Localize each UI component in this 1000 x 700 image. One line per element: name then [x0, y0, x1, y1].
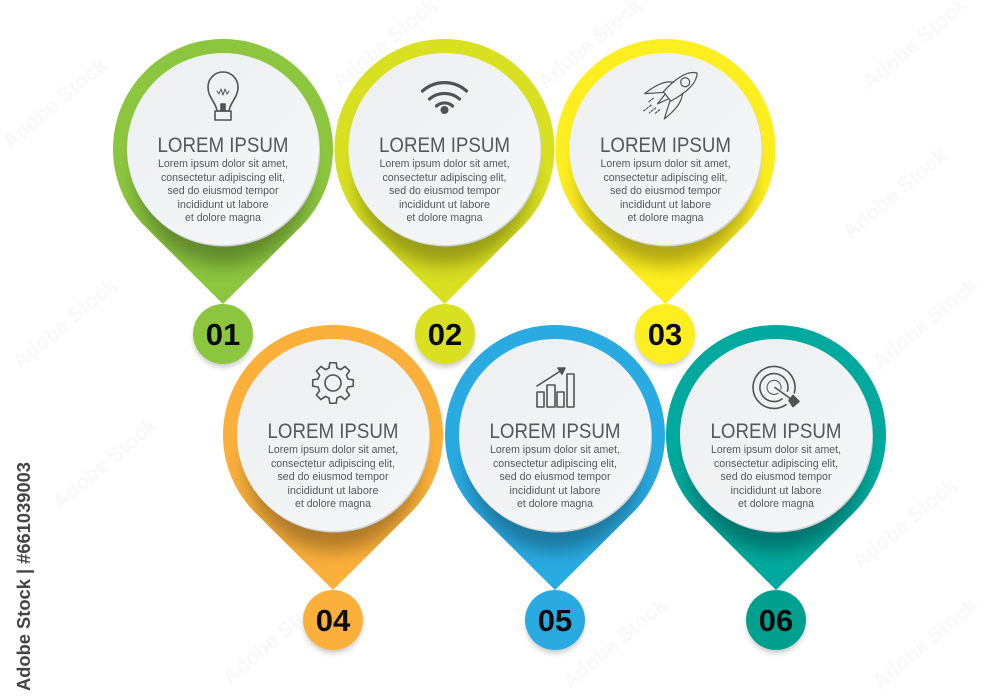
- text: Adobe Stock: [868, 594, 982, 694]
- text block 05: incididunt ut labore: [510, 485, 600, 497]
- icon: gear: [313, 363, 353, 403]
- text block 05: consectetur adipiscing elit,: [493, 458, 617, 470]
- text block 02: sed do eiusmod tempor: [389, 185, 500, 197]
- text block 04: incididunt ut labore: [288, 485, 378, 497]
- text: Adobe Stock: [868, 274, 982, 374]
- text block 02: Lorem ipsum dolor sit amet,: [380, 158, 510, 170]
- text: Adobe Stock: [848, 474, 962, 574]
- text block 04: consectetur adipiscing elit,: [271, 458, 395, 470]
- text block 04: [268, 444, 398, 510]
- text block 03: consectetur adipiscing elit,: [604, 172, 728, 184]
- heading 06: LOREM IPSUM: [710, 420, 842, 443]
- heading 05: LOREM IPSUM: [490, 420, 620, 443]
- text block 03: et dolore magna: [628, 212, 704, 224]
- heading 03: LOREM IPSUM: [600, 134, 731, 157]
- number badge 03: 03: [648, 317, 682, 352]
- icon: bar chart with arrow: [537, 368, 574, 407]
- text block 06: Lorem ipsum dolor sit amet,: [711, 444, 841, 456]
- text block 06: [711, 444, 841, 510]
- number badge 04: [303, 590, 363, 653]
- text: Adobe Stock: [0, 54, 112, 154]
- stock credit text: Adobe Stock | #661039003: [14, 462, 34, 691]
- text block 05: et dolore magna: [517, 498, 594, 510]
- text block 06: consectetur adipiscing elit,: [714, 458, 838, 470]
- text block 01: consectetur adipiscing elit,: [161, 172, 285, 184]
- number badge 02: [415, 304, 475, 367]
- number badge 06: 06: [759, 603, 793, 638]
- text: Adobe Stock: [558, 594, 672, 694]
- icon: wifi: [422, 83, 466, 114]
- heading 02: LOREM IPSUM: [379, 134, 510, 157]
- text: Adobe Stock: [218, 589, 332, 689]
- text block 05: sed do eiusmod tempor: [500, 471, 611, 483]
- pin 03: yellow: [556, 39, 776, 304]
- text block 02: incididunt ut labore: [399, 199, 490, 211]
- text block 03: sed do eiusmod tempor: [610, 185, 721, 197]
- heading 04: LOREM IPSUM: [268, 420, 398, 443]
- text block 04: sed do eiusmod tempor: [278, 471, 389, 483]
- number badge 05: 05: [538, 603, 572, 638]
- text block 01: Lorem ipsum dolor sit amet,: [158, 158, 288, 170]
- text: Adobe Stock: [8, 274, 122, 374]
- text block 02: consectetur adipiscing elit,: [382, 172, 506, 184]
- text: Adobe Stock: [48, 414, 162, 514]
- pin 02: lime: [334, 39, 554, 304]
- number badge 02: 02: [428, 317, 462, 352]
- pin 04: orange: [223, 325, 443, 590]
- text block 01: sed do eiusmod tempor: [168, 185, 279, 197]
- text block 02: [380, 158, 510, 224]
- number badge 04: 04: [316, 603, 351, 638]
- text block 03: [600, 158, 730, 224]
- icon: target with arrow: [753, 366, 799, 408]
- pin 06: teal: [666, 325, 886, 590]
- text block 01: et dolore magna: [185, 212, 262, 224]
- number badge 06: [746, 590, 806, 653]
- text: Adobe Stock: [838, 144, 952, 244]
- text block 04: Lorem ipsum dolor sit amet,: [268, 444, 398, 456]
- text block 01: [158, 158, 288, 224]
- pin 05: blue: [445, 325, 665, 590]
- text block 05: Lorem ipsum dolor sit amet,: [490, 444, 620, 456]
- text block 04: et dolore magna: [295, 498, 372, 510]
- text block 06: sed do eiusmod tempor: [720, 471, 832, 483]
- pin 01: green: [113, 39, 333, 304]
- text block 03: Lorem ipsum dolor sit amet,: [600, 158, 730, 170]
- text block 01: incididunt ut labore: [178, 199, 268, 211]
- text block 06: et dolore magna: [738, 498, 815, 510]
- number badge 01: [193, 304, 253, 367]
- text block 02: et dolore magna: [406, 212, 483, 224]
- icon: rocket: [635, 60, 707, 126]
- number badge 03: [635, 304, 695, 367]
- icon: light bulb: [208, 72, 238, 120]
- number badge 01: 01: [206, 317, 240, 352]
- text block 03: incididunt ut labore: [620, 199, 711, 211]
- number badge 05: [525, 590, 585, 653]
- text block 06: incididunt ut labore: [730, 485, 822, 497]
- text block 05: [490, 444, 620, 510]
- heading 01: LOREM IPSUM: [158, 134, 288, 157]
